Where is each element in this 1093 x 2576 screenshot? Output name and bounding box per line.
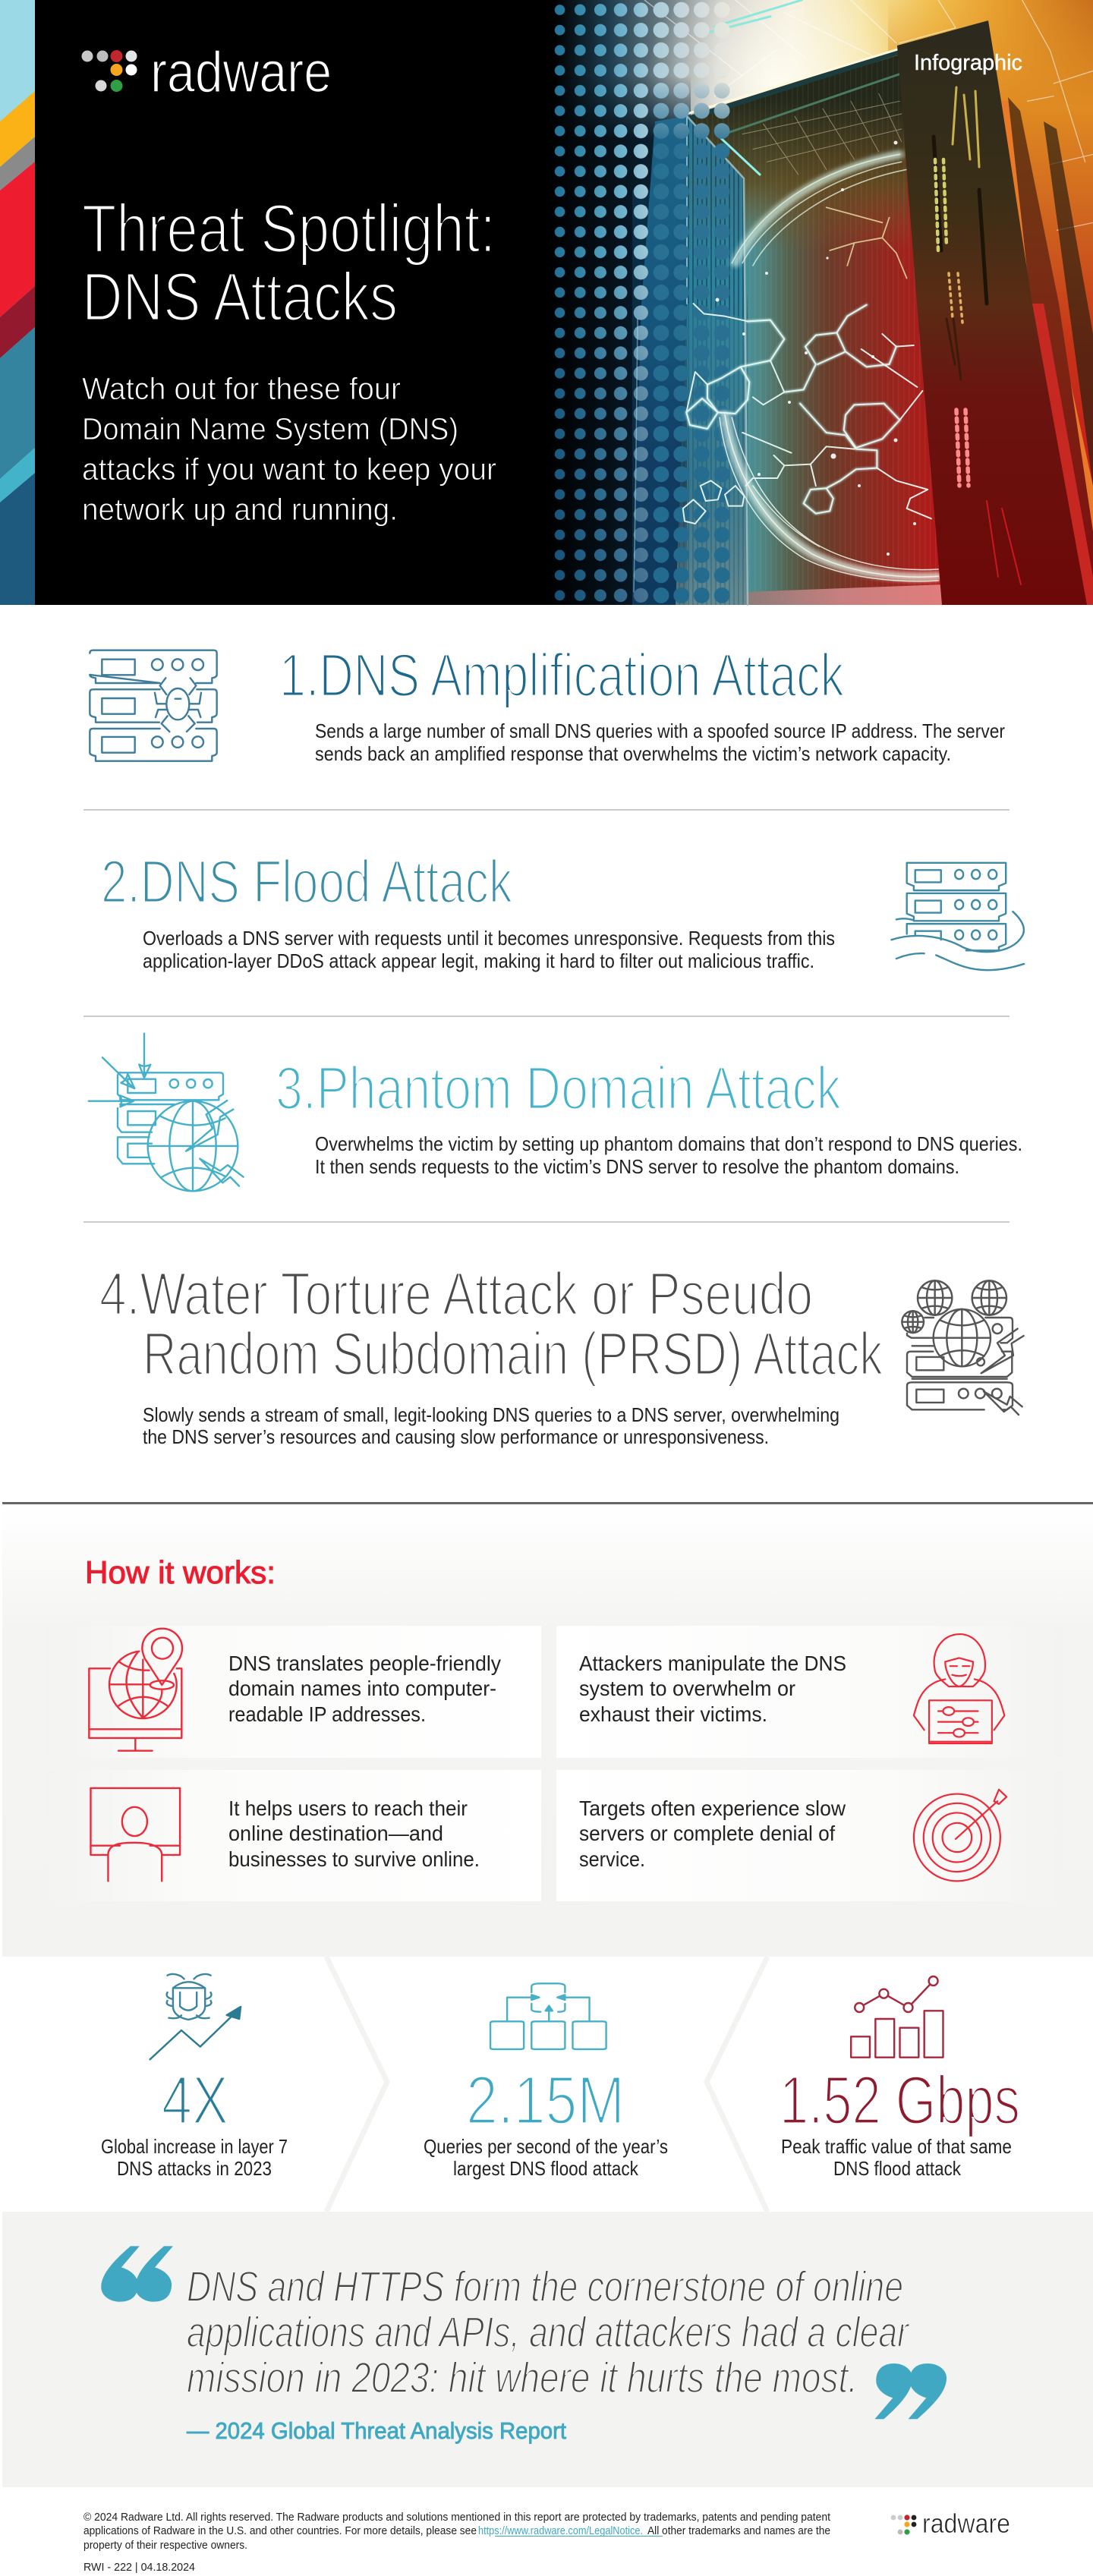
- text: online destination—and: [228, 1822, 443, 1845]
- icon: monitor globe pin: [89, 1629, 182, 1751]
- caption: largest DNS flood attack: [453, 2157, 639, 2180]
- text: system to overwhelm or: [579, 1677, 795, 1700]
- legal text: property of their respective owners.: [83, 2539, 247, 2552]
- main title: Threat Spotlight:: [82, 191, 496, 267]
- description: It then sends requests to the victim’s DNS server to resolve the phantom domains.: [315, 1155, 959, 1178]
- stat: 4X: [101, 1974, 288, 2180]
- main title: [82, 191, 496, 335]
- intro paragraph: attacks if you want to keep your: [82, 452, 496, 487]
- description: [315, 1132, 1022, 1178]
- number: 4X: [162, 2063, 228, 2139]
- heading: How it works:: [85, 1554, 276, 1590]
- caption: Peak traffic value of that same: [781, 2135, 1012, 2158]
- legal text: [83, 2511, 831, 2574]
- number: 2.15M: [466, 2063, 625, 2139]
- heading: 3.Phantom Domain Attack: [276, 1054, 842, 1122]
- legal text: https://www.radware.com/LegalNotice.: [478, 2524, 643, 2537]
- icon: bug and rising arrow: [150, 1974, 241, 2059]
- icon: target with arrow: [914, 1790, 1006, 1881]
- description: Overwhelms the victim by setting up phantom domains that don’t respond to DNS queries.: [315, 1132, 1022, 1155]
- card: targets: [556, 1770, 1063, 1901]
- description: [315, 720, 1005, 765]
- quote text: applications and APIs, and attackers had a clear: [187, 2308, 910, 2357]
- caption: DNS attacks in 2023: [117, 2157, 272, 2180]
- text: [579, 1652, 846, 1726]
- caption: [101, 2135, 288, 2180]
- hero banner: [0, 0, 1093, 605]
- icon: server with spider: [90, 650, 217, 761]
- quote text: DNS and HTTPS form the cornerstone of online: [187, 2263, 903, 2311]
- radware logo small: radware: [922, 2508, 1010, 2539]
- legal text: applications of Radware in the U.S. and other countries. For more details, please see: [83, 2524, 477, 2537]
- door LEDs and slots: [934, 87, 1021, 584]
- hero image: data centre door with glowing network: [546, 0, 1093, 605]
- text: DNS translates people-friendly: [228, 1652, 501, 1675]
- glowing particles: [715, 141, 916, 556]
- quote text: [187, 2263, 910, 2402]
- icon: hierarchy boxes: [490, 1983, 606, 2049]
- radware logo: [82, 40, 332, 105]
- left diagonal colour strip: [0, 0, 35, 605]
- heading: 2.DNS Flood Attack: [101, 848, 513, 915]
- panel: attack 1 DNS Amplification: [90, 641, 1005, 765]
- icon: flooded server: [891, 863, 1024, 970]
- legal text: RWI - 222 | 04.18.2024: [83, 2561, 195, 2574]
- text: Targets often experience slow: [579, 1797, 846, 1820]
- icon: closing quote mark: [874, 2363, 947, 2419]
- main title: DNS Attacks: [82, 260, 398, 335]
- legal text: All other trademarks and names are the: [647, 2524, 830, 2537]
- icon: opening quote mark: [101, 2246, 173, 2302]
- panel: pull quote: [2, 2212, 1093, 2487]
- panel: attack 3 Phantom Domain: [89, 1034, 1022, 1191]
- section background: How it works: [2, 1505, 1093, 1957]
- text: [228, 1652, 501, 1726]
- description: Sends a large number of small DNS queries with a spoofed source IP address. The server: [315, 720, 1005, 742]
- description: sends back an amplified response that overwhelms the victim’s network capacity.: [315, 742, 951, 765]
- panel: attack 2 DNS Flood: [101, 848, 1024, 972]
- heading: 1.DNS Amplification Attack: [279, 641, 845, 709]
- text: [228, 1797, 480, 1871]
- caption: [781, 2135, 1012, 2180]
- card: what DNS does: [46, 1626, 541, 1758]
- text: [579, 1797, 846, 1871]
- legal text: © 2024 Radware Ltd. All rights reserved. The Radware products and solutions mentioned in this report are protected by trademarks, patents and pending patent: [83, 2511, 831, 2524]
- panel: How it works: [46, 1554, 1063, 1901]
- icon: attacked server and globe: [89, 1034, 244, 1191]
- label: Infographic: Infographic: [914, 51, 1022, 75]
- number: 1.52 Gbps: [780, 2063, 1020, 2139]
- panel: statistics band: [2, 1957, 1093, 2212]
- description: Overloads a DNS server with requests until it becomes unresponsive. Requests from this: [143, 927, 835, 949]
- card: attackers: [556, 1626, 1063, 1758]
- intro paragraph: Watch out for these four: [82, 371, 401, 406]
- description: [143, 927, 835, 972]
- text: readable IP addresses.: [228, 1702, 426, 1726]
- caption: Global increase in layer 7: [101, 2135, 288, 2158]
- heading: Random Subdomain (PRSD) Attack: [143, 1320, 884, 1387]
- attribution: — 2024 Global Threat Analysis Report: [187, 2417, 566, 2444]
- description: Slowly sends a stream of small, legit-looking DNS queries to a DNS server, overwhelming: [143, 1403, 839, 1426]
- stat: 2.15M: [424, 1983, 668, 2180]
- text: domain names into computer-: [228, 1677, 496, 1700]
- intro paragraph: network up and running.: [82, 492, 398, 527]
- heading: 4.Water Torture Attack or Pseudo: [99, 1260, 813, 1327]
- quote text: mission in 2023: hit where it hurts the most.: [187, 2354, 858, 2402]
- caption: DNS flood attack: [833, 2157, 962, 2180]
- icon: globes and servers: [902, 1280, 1024, 1415]
- text: servers or complete denial of: [579, 1822, 835, 1845]
- icon: hooded hacker: [914, 1634, 1004, 1743]
- stat: 1.52 Gbps: [780, 1976, 1020, 2180]
- text: Attackers manipulate the DNS: [579, 1652, 846, 1675]
- footer: [83, 2508, 1010, 2574]
- card: why it matters: [46, 1770, 541, 1901]
- text: It helps users to reach their: [228, 1797, 468, 1820]
- radware logo: radware: [150, 40, 332, 105]
- panel: attack 4 Water Torture / PRSD: [99, 1260, 1024, 1448]
- description: application-layer DDoS attack appear legit, making it hard to filter out malicious traffic.: [143, 949, 814, 972]
- icon: person and monitor: [90, 1788, 180, 1881]
- icon: bars and line chart: [851, 1976, 943, 2058]
- radware logo small: [891, 2508, 1010, 2539]
- intro paragraph: Domain Name System (DNS): [82, 411, 458, 446]
- text: service.: [579, 1847, 645, 1871]
- description: [143, 1403, 839, 1448]
- caption: Queries per second of the year’s: [424, 2135, 668, 2158]
- text: businesses to survive online.: [228, 1847, 480, 1871]
- heading: [99, 1260, 884, 1387]
- intro paragraph: [82, 371, 496, 527]
- description: the DNS server’s resources and causing slow performance or unresponsiveness.: [143, 1425, 769, 1448]
- text: exhaust their victims.: [579, 1702, 767, 1726]
- caption: [424, 2135, 668, 2180]
